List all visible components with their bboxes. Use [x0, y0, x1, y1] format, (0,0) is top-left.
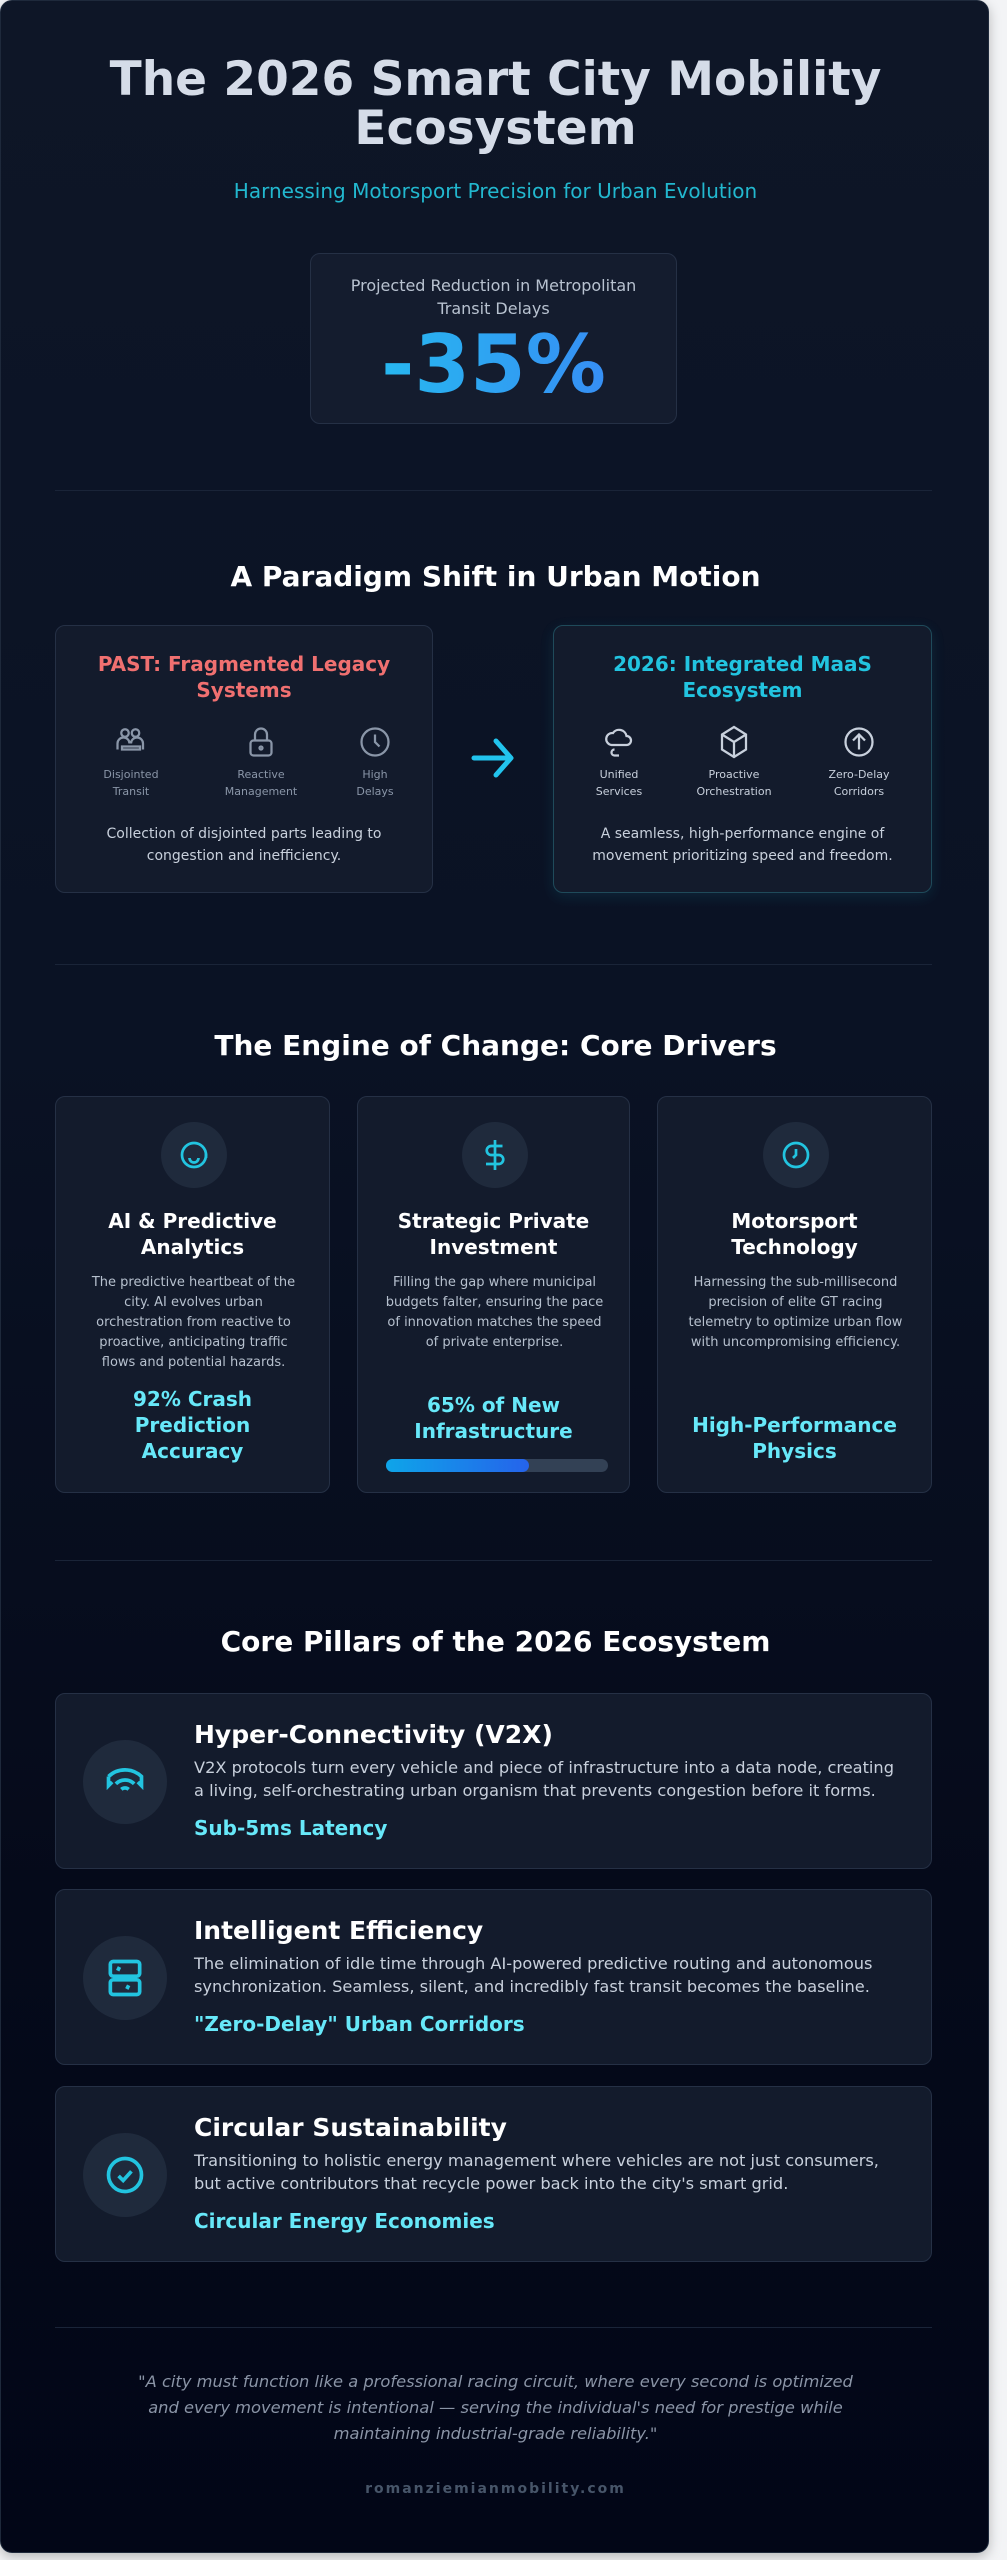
AI title: AI & Predictive: [108, 1209, 277, 1233]
icon: efficiency: [83, 1936, 167, 2020]
panel: past: [55, 625, 433, 893]
stat: "Zero-Delay" Urban Corridors: [194, 2012, 525, 2036]
heading: engine of change: The Engine of Change: Core Drivers: [214, 1029, 777, 1062]
2026 description: A seamless, high-performance engine of: [601, 826, 884, 842]
description: [194, 1954, 872, 1996]
icon: high delays: Delays: [356, 785, 394, 798]
icon: V2X: [83, 1740, 167, 1824]
motorsport stat: [692, 1413, 897, 1463]
description: [194, 1758, 894, 1800]
investment title: [398, 1209, 589, 1259]
investment stat: 65% of New: [427, 1393, 560, 1417]
icon: zero-delay corridors: Zero-Delay: [828, 768, 890, 781]
icon: unified services: Unified: [600, 768, 638, 781]
stat label: Transit Delays: [437, 299, 550, 318]
past description: Collection of disjointed parts leading to: [107, 826, 381, 842]
motorsport title: Motorsport: [731, 1209, 858, 1233]
description: a living, self-orchestrating urban organism that prevents congestion before it forms.: [194, 1781, 876, 1800]
description: [194, 2151, 879, 2193]
title: Intelligent Efficiency: [194, 1916, 483, 1945]
description: but active contributors that recycle power back into the city's smart grid.: [194, 2174, 788, 2193]
AI stat: [133, 1387, 252, 1463]
icon: unified services: Services: [596, 785, 642, 798]
AI stat: Accuracy: [142, 1439, 243, 1463]
stat label: Projected Reduction in Metropolitan: [351, 276, 636, 295]
stat label: [351, 276, 636, 318]
arrow: [472, 738, 514, 778]
past title: [98, 652, 390, 702]
AI description: The predictive heartbeat of the city. AI evolves urban orchestration from reactive to proactive, anticipating traffic flows and potential hazards.: [92, 1275, 295, 1370]
icon: proactive orchestration: Proactive: [709, 768, 759, 781]
stat box: [310, 253, 677, 424]
AI stat: 92% Crash: [133, 1387, 252, 1411]
quote: "A city must function like a professional racing circuit, where every second is optimized and every movement is intentional — serving the individual's need for prestige while maintaining industrial-grade reliability.": [138, 2372, 853, 2443]
driver card: motorsport: [657, 1096, 932, 1493]
motorsport title: [731, 1209, 858, 1259]
icon: dollar: [462, 1122, 528, 1188]
stat value: -35%: [381, 318, 606, 411]
investment stat: Infrastructure: [414, 1419, 573, 1443]
icon: proactive orchestration: Orchestration: [696, 785, 772, 798]
2026 title: [613, 652, 872, 702]
description: V2X protocols turn every vehicle and piece of infrastructure into a data node, creating: [194, 1758, 894, 1777]
motorsport title: Technology: [731, 1235, 858, 1259]
AI title: Analytics: [141, 1235, 244, 1259]
2026 title: Ecosystem: [682, 678, 803, 702]
motorsport stat: High-Performance: [692, 1413, 897, 1437]
title: Circular Sustainability: [194, 2113, 507, 2142]
icon: disjointed transit: [103, 728, 159, 798]
icon: proactive orchestration: [696, 726, 772, 798]
past description: congestion and inefficiency.: [147, 848, 341, 864]
icon: disjointed transit: Transit: [113, 785, 149, 798]
heading: core pillars: Core Pillars of the 2026 Ecosystem: [221, 1625, 770, 1658]
title: Hyper-Connectivity (V2X): [194, 1720, 553, 1749]
icon: AI: [161, 1122, 227, 1188]
investment stat: [414, 1393, 573, 1443]
title: The 2026 Smart City Mobility: [110, 52, 881, 107]
2026 description: movement prioritizing speed and freedom.: [592, 848, 893, 864]
icon: unified services: [596, 728, 642, 798]
progress bar: [386, 1459, 608, 1472]
description: Transitioning to holistic energy management where vehicles are not just consumers,: [194, 2151, 879, 2170]
investment description: Filling the gap where municipal budgets falter, ensuring the pace of innovation matches the speed of private enterprise.: [386, 1275, 603, 1350]
icon: zero-delay corridors: [828, 727, 890, 798]
description: The elimination of idle time through AI-powered predictive routing and autonomous: [194, 1954, 872, 1973]
icon: reactive management: [225, 727, 297, 798]
icon: reactive management: Management: [225, 785, 297, 798]
driver card: investment: [357, 1096, 630, 1493]
pillar: hyper-connectivity: [55, 1693, 932, 1869]
stat value: [311, 320, 676, 410]
stat: Circular Energy Economies: [194, 2209, 495, 2233]
icon: reactive management: Reactive: [237, 768, 285, 781]
icon: gauge: [763, 1122, 829, 1188]
2026 title: 2026: Integrated MaaS: [613, 652, 872, 676]
AI title: [108, 1209, 277, 1259]
icon: zero-delay corridors: Corridors: [834, 785, 884, 798]
title: Ecosystem: [354, 101, 637, 156]
investment title: Investment: [430, 1235, 557, 1259]
pillar: efficiency: [55, 1889, 932, 2065]
footer: romanziemianmobility.com: [365, 2481, 626, 2497]
past description: [107, 826, 381, 864]
past title: Systems: [196, 678, 292, 702]
2026 description: [592, 826, 893, 864]
pillar: sustainability: [55, 2086, 932, 2262]
icon: disjointed transit: Disjointed: [103, 768, 159, 781]
description: synchronization. Seamless, silent, and incredibly fast transit becomes the baseline.: [194, 1977, 870, 1996]
heading: paradigm shift: A Paradigm Shift in Urban Motion: [230, 560, 761, 593]
motorsport stat: Physics: [752, 1439, 837, 1463]
AI stat: Prediction: [135, 1413, 250, 1437]
subtitle: Harnessing Motorsport Precision for Urban Evolution: [234, 179, 757, 203]
icon: high delays: [356, 727, 394, 798]
investment title: Strategic Private: [398, 1209, 589, 1233]
icon: check circle: [83, 2133, 167, 2217]
stat: Sub-5ms Latency: [194, 1816, 387, 1840]
past title: PAST: Fragmented Legacy: [98, 652, 390, 676]
title: [110, 52, 881, 156]
panel: 2026: [553, 625, 932, 893]
motorsport description: Harnessing the sub-millisecond precision of elite GT racing telemetry to optimize urban flow with uncompromising efficiency.: [689, 1275, 902, 1350]
icon: high delays: High: [362, 768, 388, 781]
driver card: AI: [55, 1096, 330, 1493]
